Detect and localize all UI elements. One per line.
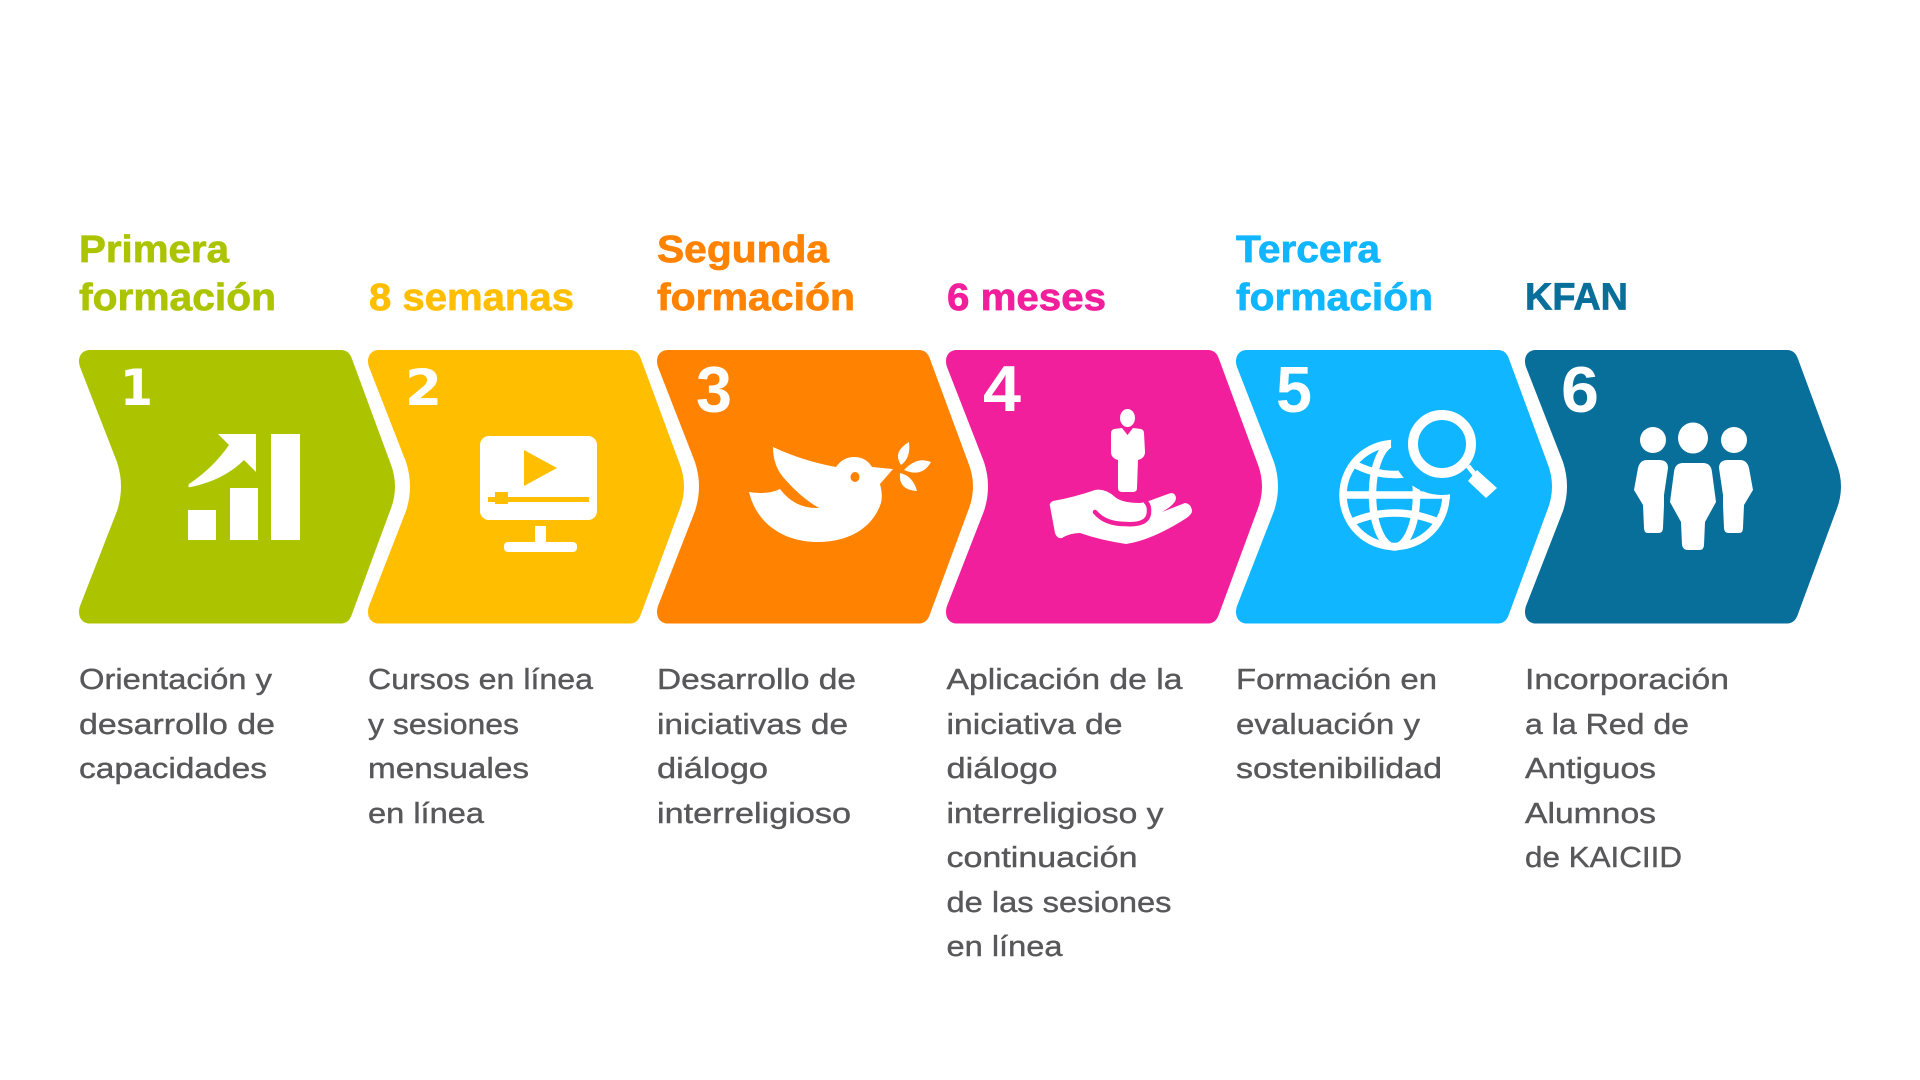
icon: video on monitor: [480, 436, 597, 552]
description 4: [946, 664, 1183, 963]
description 6: [1525, 664, 1729, 874]
description 2: [368, 664, 594, 830]
description 1: Orientación y: [79, 664, 273, 696]
number 2: 2: [405, 359, 442, 417]
icon: group of three people: [1634, 422, 1753, 550]
heading: Tercera formación: [1236, 229, 1433, 319]
chevron 6: [1525, 350, 1841, 624]
step 5: tercera formación: [1236, 229, 1552, 785]
description 4: diálogo: [946, 753, 1058, 785]
description 4: Aplicación de la: [946, 664, 1183, 696]
description 3: interreligioso: [657, 798, 851, 830]
number 3: 3: [696, 353, 732, 426]
description 3: diálogo: [657, 753, 768, 785]
description 1: desarrollo de: [79, 709, 275, 741]
step 3: segunda formación: [657, 229, 973, 830]
icon: rising bar chart: [188, 434, 300, 540]
heading: Tercera formación: Tercera: [1236, 229, 1381, 271]
heading: Segunda formación: Segunda: [657, 229, 830, 271]
heading: Segunda formación: formación: [657, 277, 855, 319]
heading: 6 meses: 6 meses: [947, 277, 1106, 319]
description 6: de KAICIID: [1525, 842, 1682, 874]
icon: globe with magnifier: [1340, 415, 1497, 547]
description 6: a la Red de: [1525, 709, 1689, 741]
step 2: 8 semanas: [368, 277, 684, 830]
description 3: iniciativas de: [657, 709, 848, 741]
step 1: primera formación: [79, 229, 395, 785]
chevron 5: [1236, 350, 1552, 624]
description 2: mensuales: [368, 753, 529, 785]
description 2: en línea: [368, 798, 485, 830]
chevron 1: [79, 350, 395, 624]
step 4: 6 meses: [946, 277, 1262, 963]
number 6: 6: [1561, 353, 1599, 426]
description 6: Alumnos: [1525, 798, 1656, 830]
description 5: Formación en: [1236, 664, 1437, 696]
description 3: [657, 664, 856, 830]
description 2: y sesiones: [368, 709, 519, 741]
description 1: capacidades: [79, 753, 267, 785]
heading: Primera formación: Primera: [79, 229, 230, 271]
description 4: continuación: [946, 842, 1138, 874]
number 4: 4: [983, 352, 1021, 425]
description 4: iniciativa de: [946, 709, 1122, 741]
number 1: 1: [120, 359, 153, 417]
description 6: Antiguos: [1525, 753, 1656, 785]
chevron 2: [368, 350, 684, 624]
icon: person on open hand: [1050, 409, 1192, 544]
description 6: Incorporación: [1525, 664, 1729, 696]
icon: dove with olive branch: [749, 442, 931, 542]
chevron 4: [946, 350, 1262, 624]
heading: Segunda formación: [657, 229, 855, 319]
heading: 8 semanas: 8 semanas: [369, 277, 574, 319]
description 5: [1236, 664, 1442, 785]
heading: Primera formación: [79, 229, 276, 319]
heading: Primera formación: formación: [79, 277, 276, 319]
chevron 3: [657, 350, 973, 624]
number 5: 5: [1276, 353, 1312, 426]
step 6: KFAN: [1525, 276, 1841, 874]
description 5: evaluación y: [1236, 709, 1421, 741]
description 4: interreligioso y: [946, 798, 1164, 830]
description 3: Desarrollo de: [657, 664, 856, 696]
description 4: en línea: [946, 931, 1063, 963]
description 1: [79, 664, 275, 785]
heading: Tercera formación: formación: [1236, 277, 1433, 319]
description 4: de las sesiones: [946, 887, 1172, 919]
description 2: Cursos en línea: [368, 664, 594, 696]
heading: KFAN: KFAN: [1525, 276, 1628, 318]
description 5: sostenibilidad: [1236, 753, 1442, 785]
